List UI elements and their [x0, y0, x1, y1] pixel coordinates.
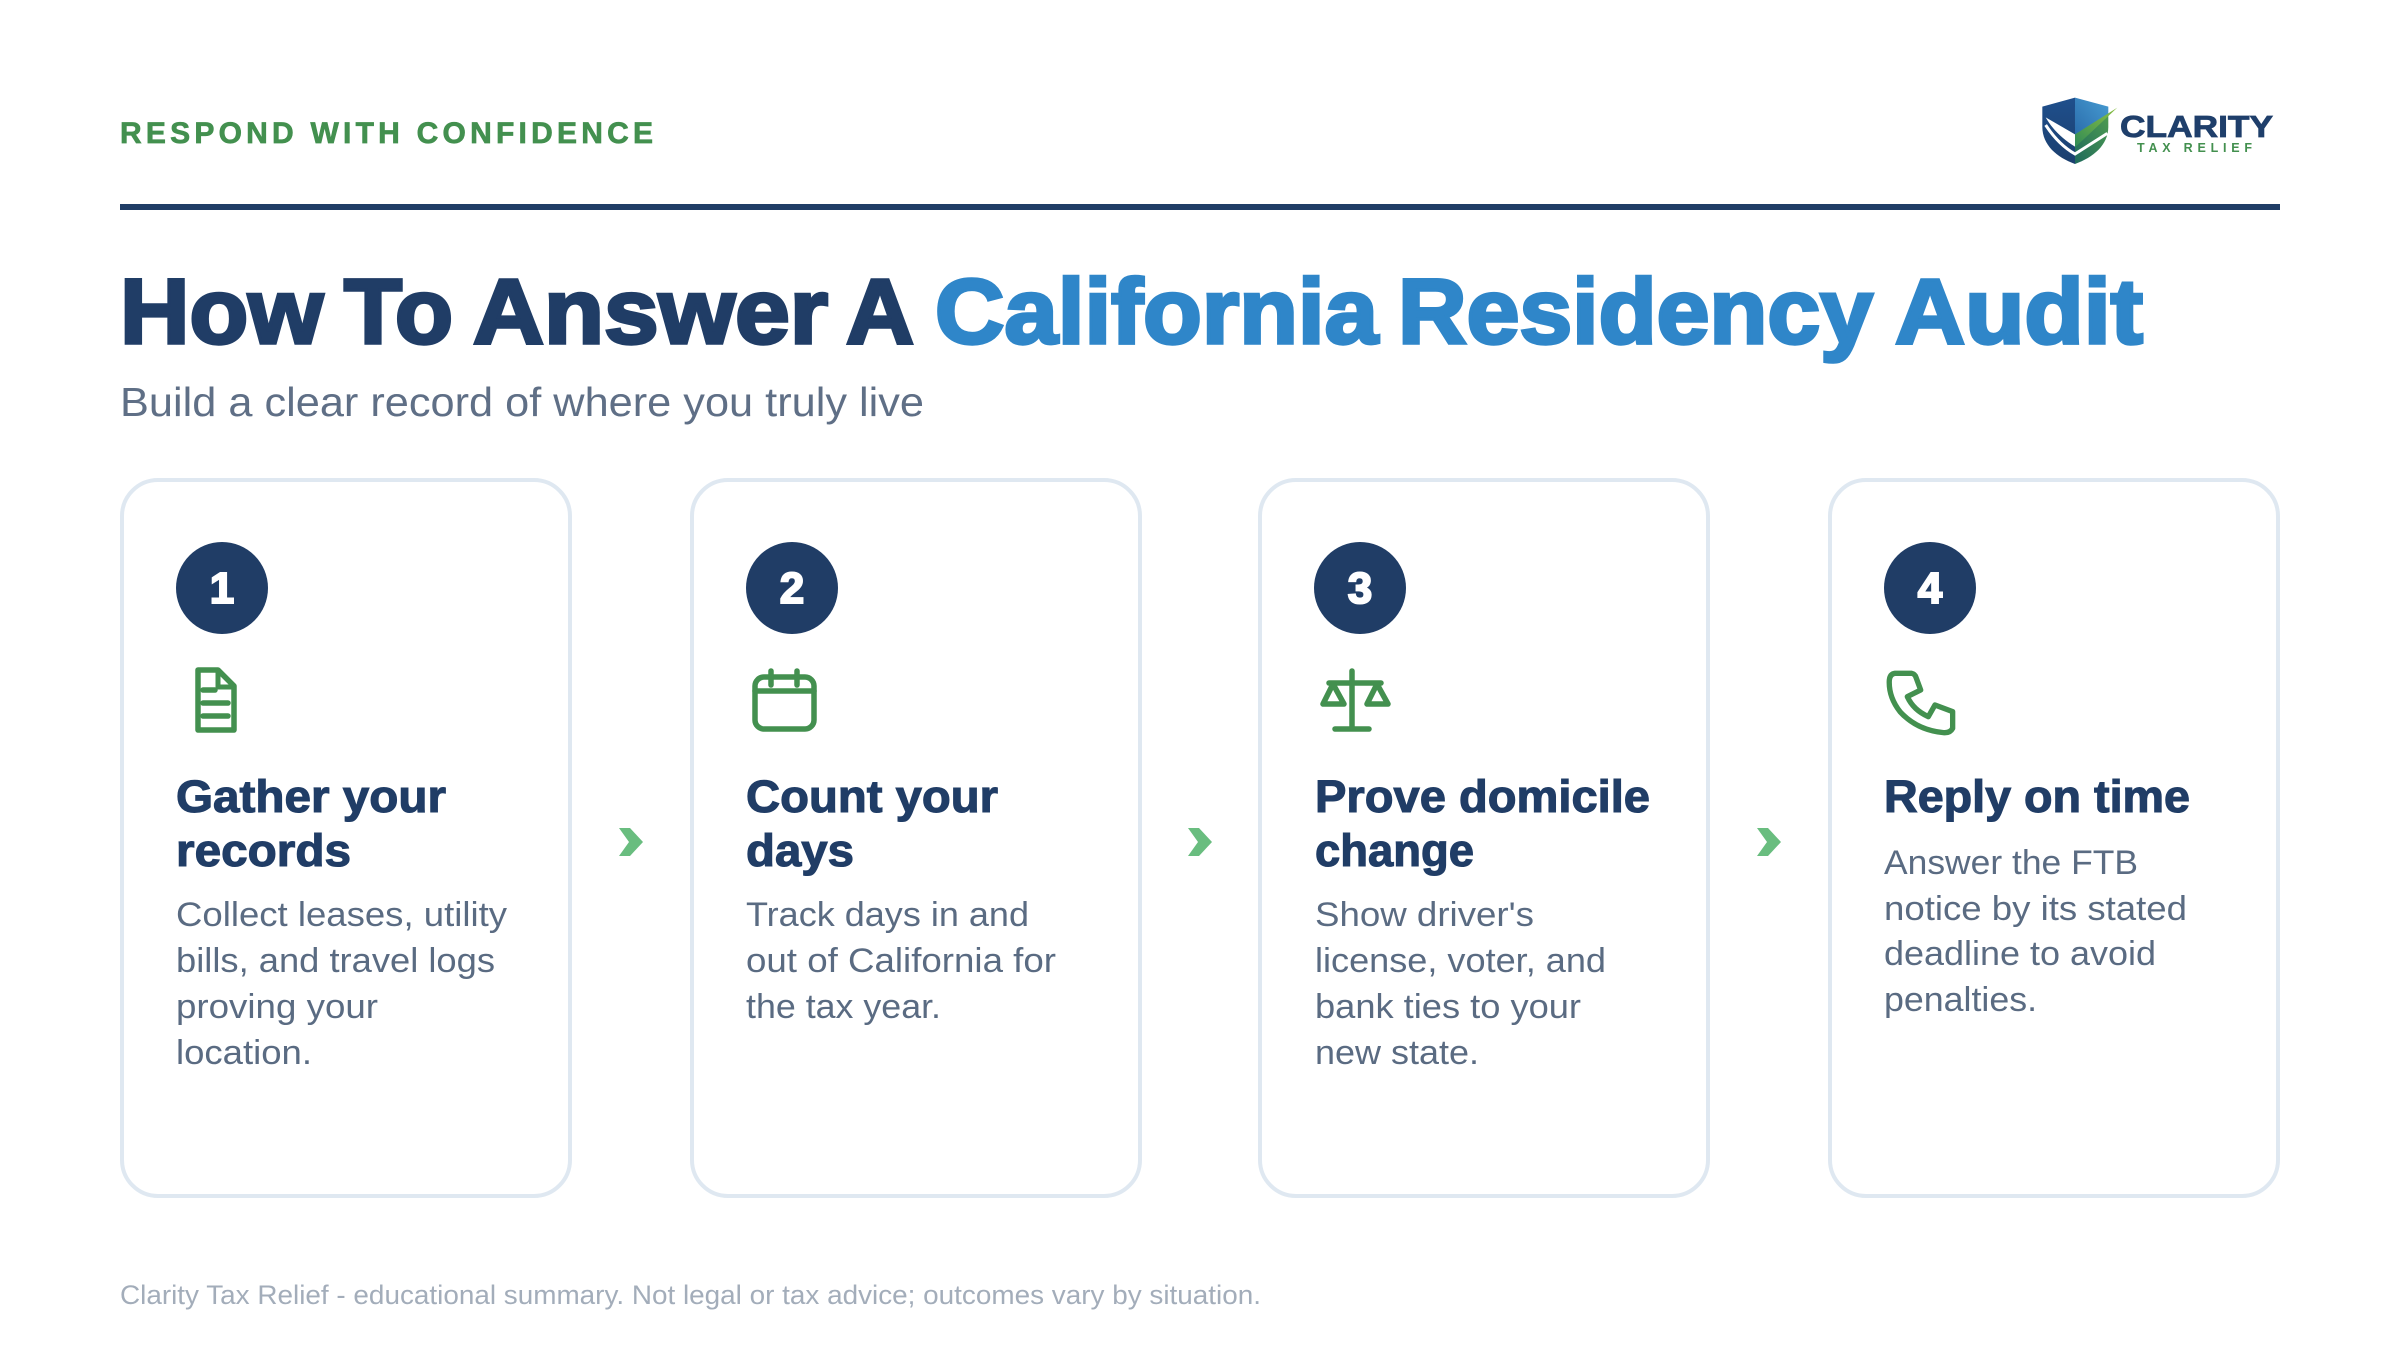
subtitle: Build a clear record of where you truly live: [120, 379, 924, 425]
step number 4: 4: [1918, 564, 1943, 613]
icon: calendar: [755, 671, 814, 729]
step 1 heading: Gather your: [176, 771, 446, 822]
step 4 description: notice by its stated: [1884, 890, 2187, 928]
step 2 heading: Count your: [746, 771, 998, 822]
step 2 description: Track days in and: [746, 896, 1029, 934]
step 3 heading: [1315, 771, 1650, 876]
step 1 description: bills, and travel logs: [176, 942, 495, 980]
step 1 description: location.: [176, 1034, 312, 1072]
title: Answer: [473, 261, 828, 363]
step 1 description: Collect leases, utility: [176, 896, 507, 934]
step 2 description: out of California for: [746, 942, 1056, 980]
arrow 1: [619, 828, 643, 856]
arrow 2: [1188, 828, 1212, 856]
title: To: [344, 261, 453, 363]
step number 3: 3: [1348, 564, 1372, 613]
title: Audit: [1895, 261, 2143, 363]
step number 1: 1: [210, 564, 234, 613]
title: Residency: [1398, 261, 1873, 363]
icon: scales: [1323, 671, 1388, 729]
footer disclaimer: Clarity Tax Relief - educational summary. Not legal or tax advice; outcomes vary by situation.: [120, 1280, 1261, 1310]
icon: document: [198, 670, 234, 730]
step 3 description: new state.: [1315, 1034, 1479, 1072]
eyebrow label: RESPOND WITH CONFIDENCE: [120, 117, 653, 150]
step number 1: [176, 542, 268, 634]
step 3 heading: Prove domicile: [1315, 771, 1650, 822]
header rule: [120, 204, 2280, 210]
step 4 heading: Reply on time: [1884, 771, 2190, 822]
step 4 description: Answer the FTB: [1884, 844, 2138, 882]
step 3 description: license, voter, and: [1315, 942, 1606, 980]
step 2 heading: days: [746, 825, 854, 876]
title: How: [120, 261, 323, 363]
title: [120, 261, 2143, 363]
step number 2: 2: [780, 564, 804, 613]
step 3 description: Show driver's: [1315, 896, 1534, 934]
panel: step 3: [1260, 480, 1708, 1196]
step 3 description: [1315, 896, 1606, 1072]
title: A: [846, 261, 914, 363]
logo tagline: TAX RELIEF: [2137, 141, 2252, 155]
step number 3: [1314, 542, 1406, 634]
logo shield: [2042, 98, 2117, 164]
step number 2: [746, 542, 838, 634]
icon: phone: [1889, 673, 1953, 733]
step 3 description: bank ties to your: [1315, 988, 1581, 1026]
step 4 description: [1884, 844, 2187, 1019]
step 3 heading: change: [1315, 825, 1474, 876]
step 1 description: proving your: [176, 988, 378, 1026]
step 1 description: [176, 896, 507, 1072]
step number 4: [1884, 542, 1976, 634]
step 1 heading: [176, 771, 446, 876]
step 2 description: the tax year.: [746, 988, 941, 1026]
logo: Clarity Tax Relief: [2042, 98, 2273, 164]
arrow 3: [1757, 828, 1781, 856]
step 2 heading: [746, 771, 998, 876]
panel: step 2: [692, 480, 1140, 1196]
panel: step 4: [1830, 480, 2278, 1196]
panel: step 1: [122, 480, 570, 1196]
step 4 description: deadline to avoid: [1884, 935, 2156, 973]
title: California: [935, 261, 1379, 363]
step 2 description: [746, 896, 1056, 1026]
logo wordmark: CLARITY: [2120, 109, 2273, 144]
step 1 heading: records: [176, 825, 351, 876]
step 4 description: penalties.: [1884, 981, 2037, 1019]
